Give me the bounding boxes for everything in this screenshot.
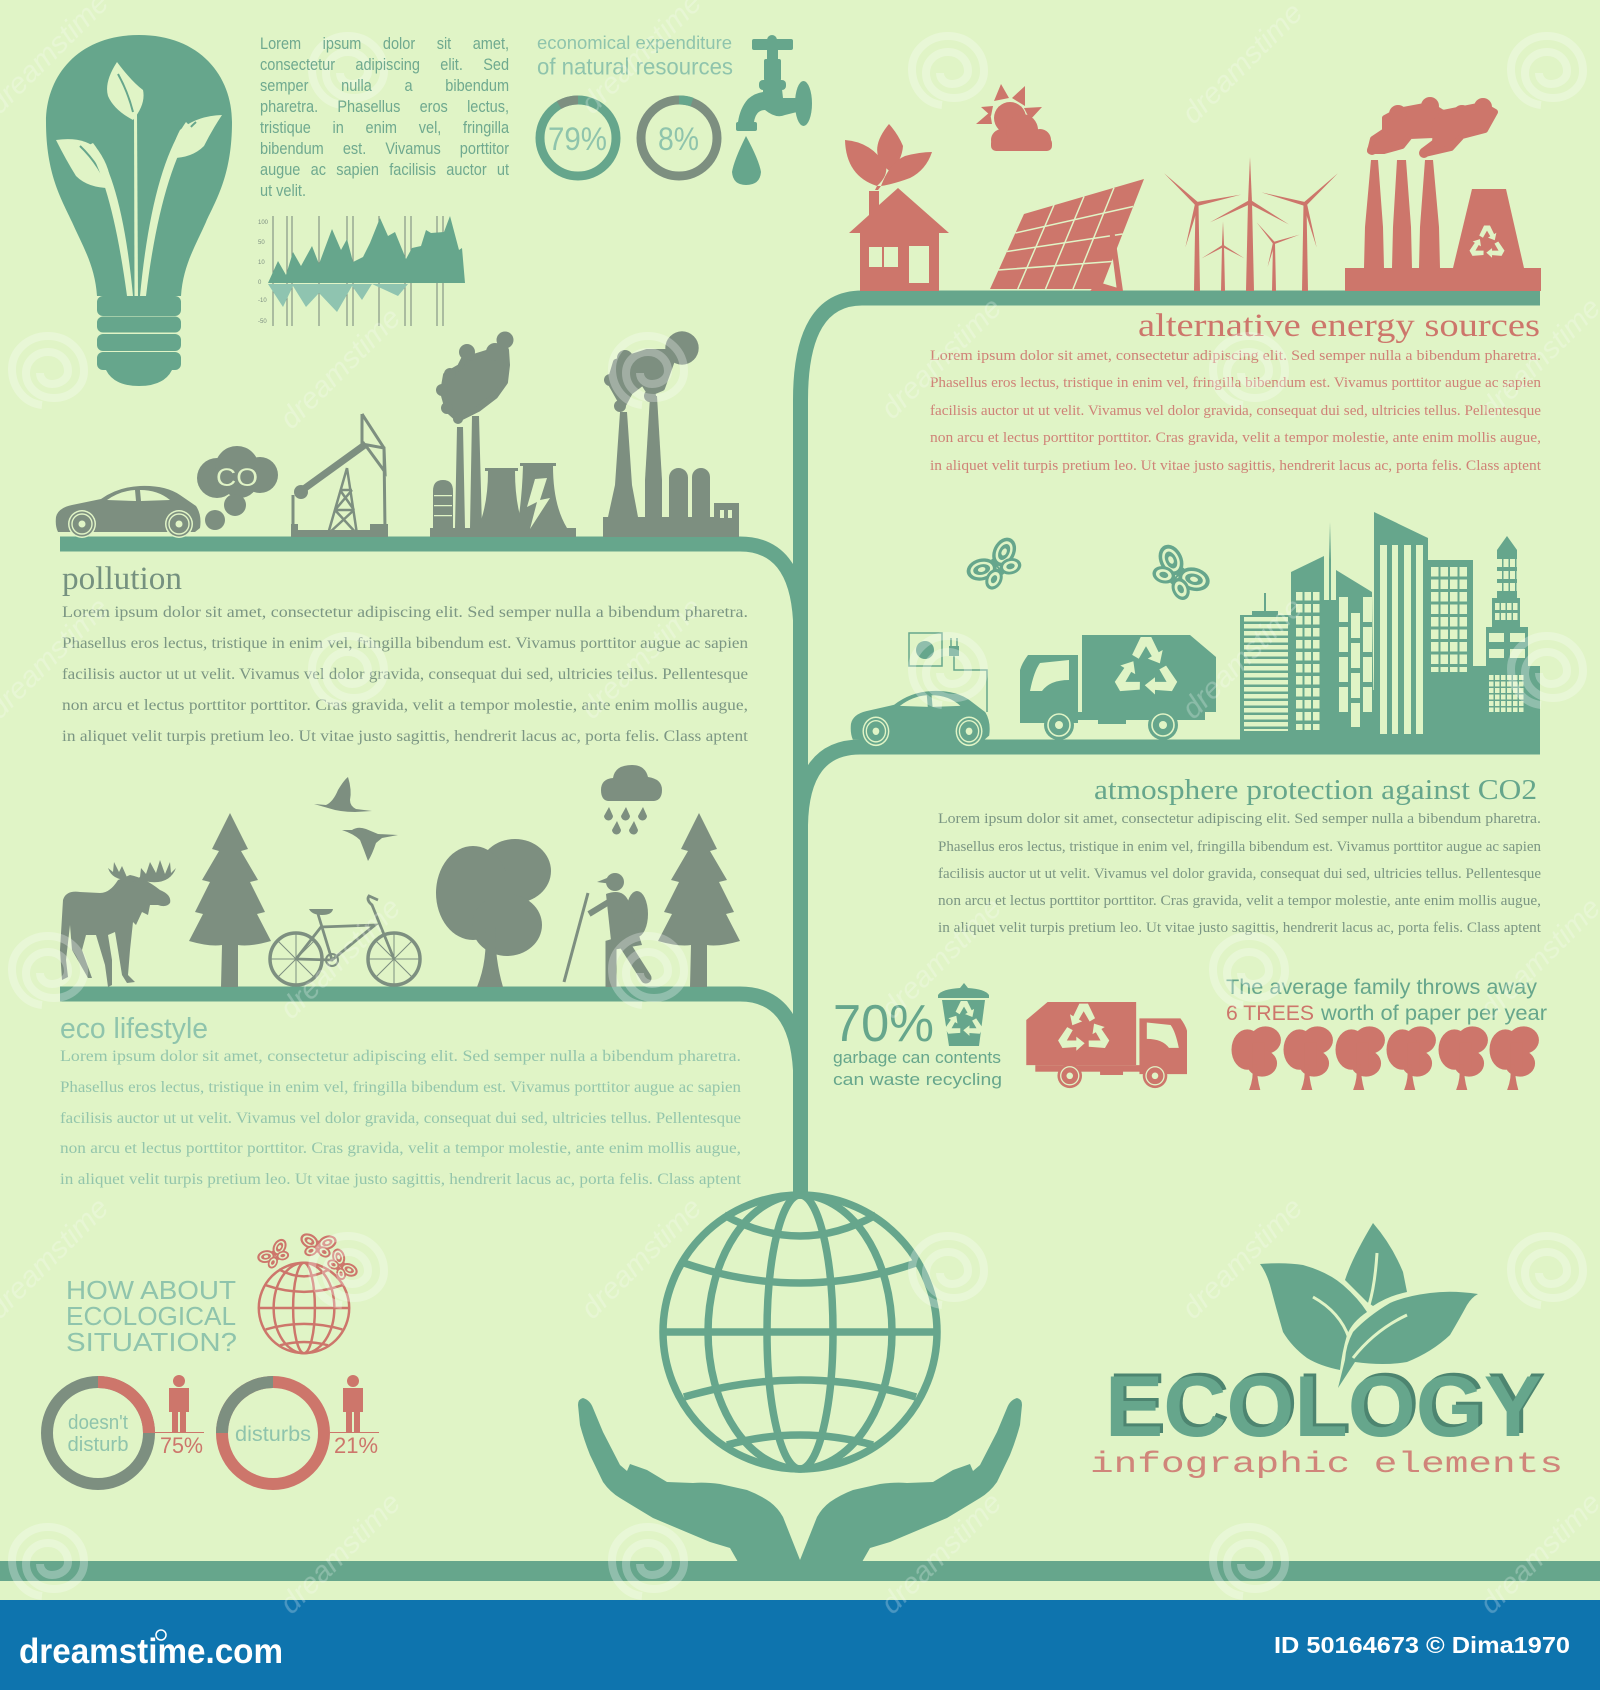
text block: pollution paragraph: Lorem ipsum dolor sit amet, consectetur adipiscing elit. Sed semper nulla a bibendum pharetra. [62,604,748,621]
donut chart: 8% [641,100,717,176]
footer bar [0,1600,1600,1690]
icon: polluting car [56,486,200,538]
icon: hiker [564,873,648,987]
icon: sun behind cloud [976,84,1052,151]
icon: left hand [578,1398,800,1581]
icon: oil pump jack [291,414,388,537]
chart: area chart: 100 [258,220,269,226]
icon: recycling truck [1020,635,1216,740]
icon: power plant [430,332,576,537]
icon: round tree [436,839,551,987]
stat: person 21%: 21% [334,1433,378,1458]
stat: person 75% [155,1375,204,1458]
icon: recycling bin [938,983,989,1046]
icon: electric car [851,691,990,746]
text block: alternative energy paragraph: facilisis auctor ut ut velit. Vivamus vel dolor gravida, consequat dui sed, ultricies tellus. Pellentesque [930,403,1541,419]
heading: eco lifestyle: eco lifestyle [60,1013,208,1045]
icon: butterfly right [1138,534,1220,614]
chart: area chart: 10 [258,260,265,266]
stat: six trees text [1226,976,1547,1025]
text block: atmosphere paragraph: in aliquet velit turpis pretium leo. Ut vitae justo sagittis, hendrerit lacus ac, porta felis. Class aptent [938,920,1542,936]
text block: alternative energy paragraph: non arcu et lectus porttitor porttitor. Cras gravida, velit a tempor molestie, ante enim mollis augue, [930,430,1541,446]
footer: image id and author: ID 50164673 © Dima1970 [1274,1632,1570,1658]
icon: pine tree left [189,813,271,987]
chart: area chart: 0 [258,280,262,286]
stat: six trees text: 6 TREES [1226,1002,1314,1025]
heading: economical expenditure: of natural resources [537,54,733,80]
text block: alternative energy paragraph: in aliquet velit turpis pretium leo. Ut vitae justo sagittis, hendrerit lacus ac, porta felis. Class aptent [930,458,1542,474]
stat: person 75%: 75% [160,1433,203,1458]
stat: person 21% [330,1375,379,1458]
text block: intro paragraph: semper nulla a bibendum [260,77,509,95]
text block: eco lifestyle paragraph: non arcu et lectus porttitor porttitor. Cras gravida, velit a tempor molestie, ante enim mollis augue, [60,1140,741,1157]
heading: pollution: pollution [62,561,182,597]
icon: eco house with leaves [845,124,949,291]
icon: water tap [732,35,812,185]
text block: pollution paragraph: facilisis auctor ut ut velit. Vivamus vel dolor gravida, consequat dui sed, ultricies tellus. Pellentesque [62,666,748,683]
chart: area chart: 50 [258,240,265,246]
icon: factory with smoke [603,331,739,537]
icon: ecology logo leaves [1260,1223,1478,1388]
heading: how about ecological situation: SITUATION? [66,1327,237,1357]
icon: red recycling truck [1026,1002,1187,1088]
text block: eco lifestyle paragraph: Phasellus eros lectus, tristique in enim vel, fringilla bibendum est. Vivamus porttitor augue ac sapien [60,1079,741,1096]
text block: eco lifestyle paragraph: in aliquet velit turpis pretium leo. Ut vitae justo sagittis, hendrerit lacus ac, porta felis. Class aptent [60,1171,742,1188]
text block: pollution paragraph: in aliquet velit turpis pretium leo. Ut vitae justo sagittis, hendrerit lacus ac, porta felis. Class aptent [62,728,749,745]
stat: 70% garbage: can waste recycling [833,1070,1002,1089]
text block: atmosphere paragraph [938,811,1542,936]
icon row: six red trees [1231,1026,1539,1090]
donut chart: 79%: 79% [548,121,607,157]
text block: alternative energy paragraph: Lorem ipsum dolor sit amet, consectetur adipiscing elit. Sed semper nulla a bibendum pharetra. [930,348,1541,364]
donut chart: doesn't disturb 75%: disturb [68,1434,128,1456]
text block: intro paragraph: augue ac sapien facilisis auctor ut [260,161,509,179]
footer: dreamstime logo: dreamstime.com [19,1632,283,1671]
icon: recycling factory [1345,97,1541,291]
heading: economical expenditure [537,33,733,80]
text block: intro paragraph: tristique in enim vel, fringilla [260,119,509,137]
text block: intro paragraph: consectetur adipiscing elit. Sed [260,56,509,74]
text block: atmosphere paragraph: non arcu et lectus porttitor porttitor. Cras gravida, velit a tempor molestie, ante enim mollis augue, [938,893,1541,909]
chart: area chart: -10 [258,298,267,304]
text block: pollution paragraph [62,604,749,745]
heading: atmosphere protection against CO2: atmosphere protection against CO2 [1094,775,1537,806]
tree trunk and branches [60,298,1540,1195]
icon: rain cloud [601,765,662,834]
heading: how about ecological situation [66,1275,237,1357]
icon: solar panel [990,179,1144,291]
chart: area chart: -50 [258,319,267,325]
icon: light bulb with sprout [46,35,232,386]
text block: alternative energy paragraph: Phasellus eros lectus, tristique in enim vel, fringilla bibendum est. Vivamus porttitor augue ac sapien [930,375,1541,391]
icon: butterfly left [957,528,1035,602]
stat: six trees text: The average family throws away [1226,976,1538,999]
donut chart: disturbs 21% [222,1382,324,1484]
subtitle: infographic elements: infographic elements [1090,1448,1563,1482]
heading: how about ecological situation: HOW ABOUT [66,1275,236,1305]
text block: eco lifestyle paragraph [60,1048,742,1188]
icon: bicycle [270,896,420,985]
icon: moose [60,860,176,987]
donut chart: doesn't disturb 75%: doesn't [68,1412,128,1434]
icon: birds [314,777,398,861]
icon: CO cloud: CO [216,464,258,492]
heading: alternative energy sources: alternative energy sources [1138,308,1540,344]
text block: eco lifestyle paragraph: Lorem ipsum dolor sit amet, consectetur adipiscing elit. Sed semper nulla a bibendum pharetra. [60,1048,741,1065]
text block: eco lifestyle paragraph: facilisis auctor ut ut velit. Vivamus vel dolor gravida, consequat dui sed, ultricies tellus. Pellentesque [60,1110,741,1127]
text block: pollution paragraph: non arcu et lectus porttitor porttitor. Cras gravida, velit a tempor molestie, ante enim mollis augue, [62,697,748,714]
heading: economical expenditure: economical expenditure [537,33,732,53]
text block: intro paragraph: bibendum est. Vivamus porttitor [260,140,509,158]
title: ECOLOGY: ECOLOGY [1108,1356,1546,1452]
donut chart: doesn't disturb 75% [47,1382,149,1484]
icon: electric socket and cable [909,633,987,712]
stat: six trees text: worth of paper per year [1320,1002,1547,1025]
stat: 70% garbage [833,995,1002,1089]
text block: pollution paragraph: Phasellus eros lectus, tristique in enim vel, fringilla bibendum est. Vivamus porttitor augue ac sapien [62,635,748,652]
donut chart: 79% [540,100,616,176]
text block: atmosphere paragraph: Phasellus eros lectus, tristique in enim vel, fringilla bibendum est. Vivamus porttitor augue ac sapien [938,839,1541,855]
text block: atmosphere paragraph: facilisis auctor ut ut velit. Vivamus vel dolor gravida, consequat dui sed, ultricies tellus. Pellentesque [938,866,1541,882]
stat: 70% garbage: 70% [833,995,934,1053]
bottom ground bar [0,1561,1600,1581]
chart: area chart [258,216,465,326]
text block: intro paragraph: ut velit. [260,182,306,200]
icon: pine tree right [658,813,740,987]
icon: red globe with butterflies [252,1230,363,1353]
icon: green city skyline [1240,512,1540,740]
heading: how about ecological situation: ECOLOGICAL [66,1301,236,1331]
icon: globe [663,1195,937,1469]
text block: alternative energy paragraph [930,348,1542,474]
title: ECOLOGY: ECOLOGY [1105,1359,1542,1455]
donut chart: 8%: 8% [658,121,699,157]
text block: atmosphere paragraph: Lorem ipsum dolor sit amet, consectetur adipiscing elit. Sed semper nulla a bibendum pharetra. [938,811,1541,827]
stat: 70% garbage: garbage can contents [833,1048,1001,1067]
icon: wind turbines [1163,157,1339,291]
icon: CO cloud [197,446,278,530]
icon: right hand [800,1398,1022,1581]
donut chart: disturbs 21%: disturbs [235,1423,311,1446]
text block: intro paragraph [260,35,510,200]
text block: intro paragraph: Lorem ipsum dolor sit amet, [260,35,509,53]
text block: intro paragraph: pharetra. Phasellus eros lectus, [260,98,509,116]
